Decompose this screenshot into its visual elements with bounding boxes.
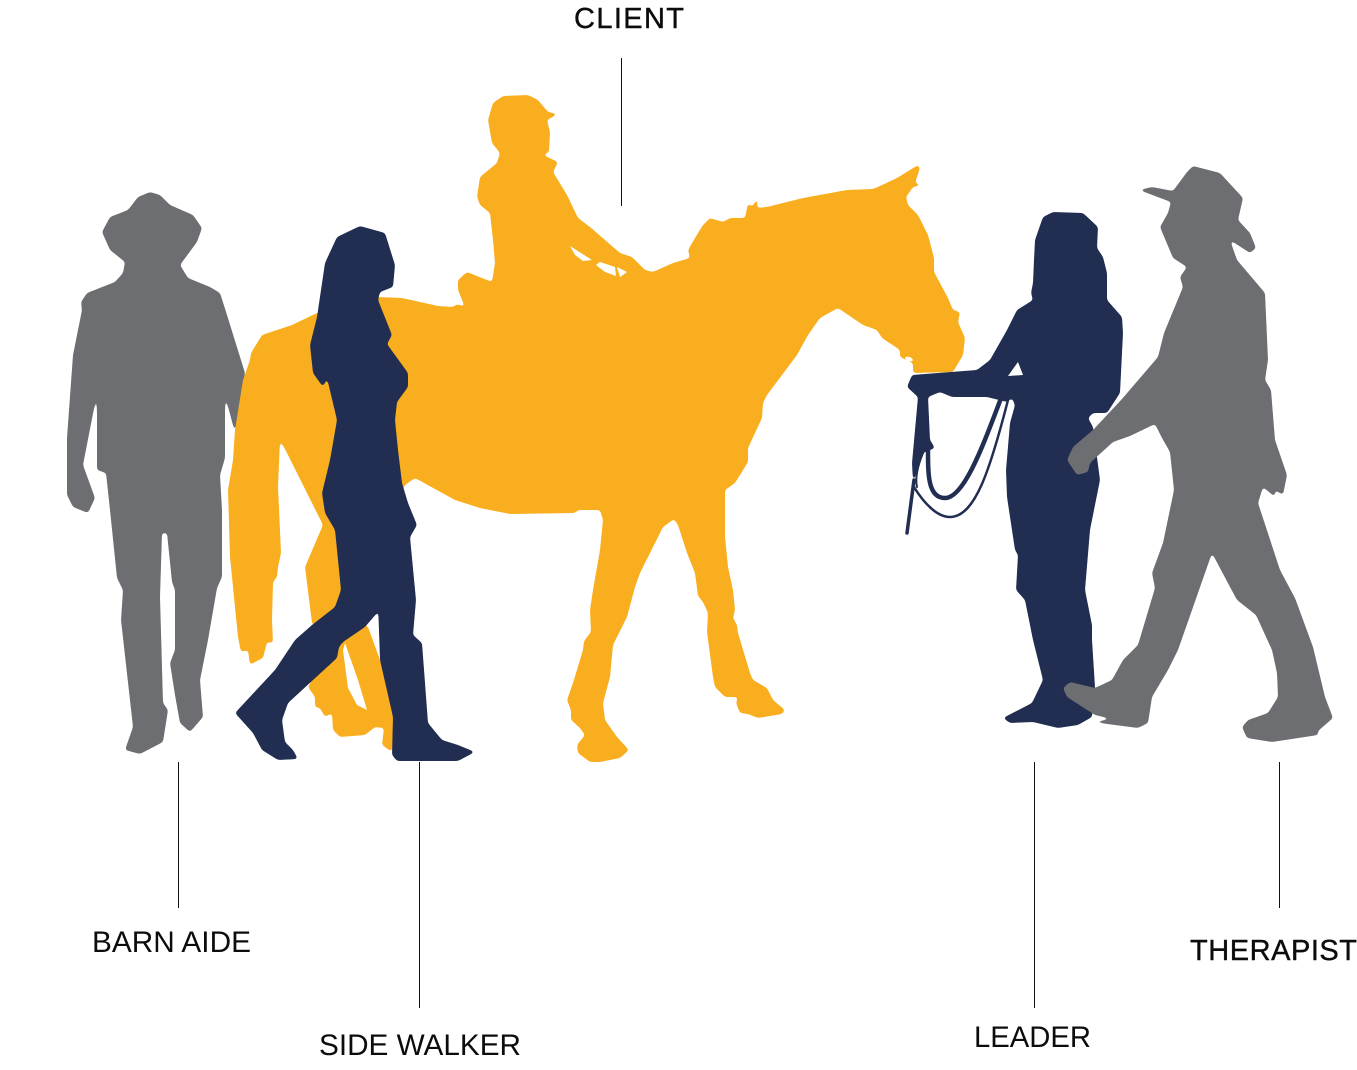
line: side walker bbox=[418, 762, 420, 1008]
line: client bbox=[620, 58, 622, 206]
horse rear lower leg bbox=[308, 610, 395, 752]
line: barn aide bbox=[178, 762, 180, 908]
label: therapist: THERAPIST bbox=[1190, 935, 1357, 967]
label: side walker: SIDE WALKER bbox=[319, 1029, 521, 1062]
lead rope bbox=[907, 393, 1008, 533]
silhouette: leader with lead rope bbox=[907, 212, 1123, 728]
line: leader bbox=[1034, 762, 1036, 1008]
saddle and rein gaps bbox=[343, 246, 913, 710]
line: therapist bbox=[1278, 762, 1280, 908]
silhouette: barn aide bbox=[67, 192, 245, 754]
label: barn aide: BARN AIDE bbox=[92, 926, 251, 959]
gap between arm and torso bbox=[1008, 362, 1023, 376]
silhouette: client riding horse bbox=[228, 95, 965, 762]
label: client: CLIENT bbox=[574, 3, 684, 35]
silhouette: side walker bbox=[235, 226, 475, 761]
silhouette: therapist bbox=[1063, 166, 1333, 742]
label: leader: LEADER bbox=[974, 1021, 1091, 1054]
